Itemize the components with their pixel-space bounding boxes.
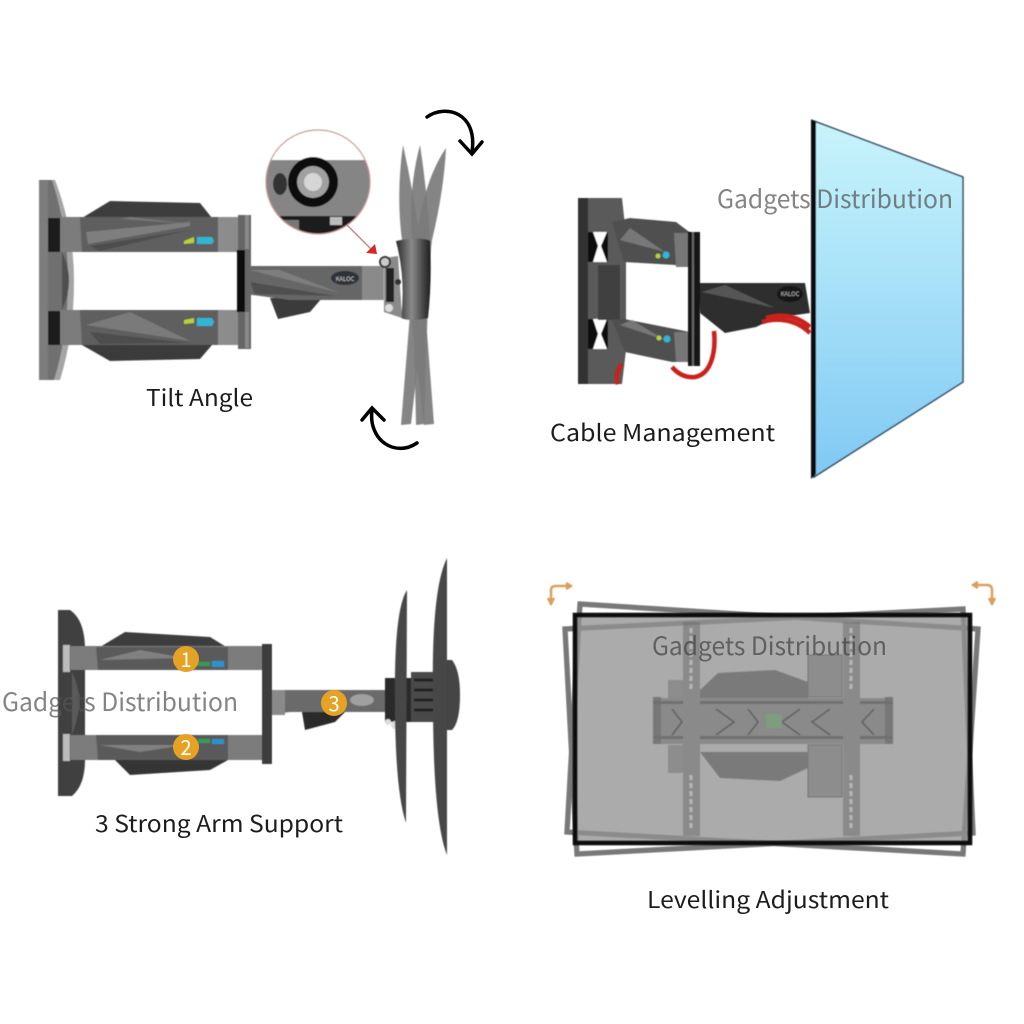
- icon: red cable: [617, 316, 810, 384]
- arrow: left rotation: [548, 583, 571, 604]
- icon: lower arm: [60, 310, 240, 361]
- icon: forearm: KALOC: [781, 289, 800, 298]
- panel: arm support: [2, 558, 460, 855]
- icon: wall plate: [39, 180, 74, 380]
- panel: cable management: [550, 119, 963, 479]
- icon: upper arm: [612, 218, 692, 267]
- watermark: Gadgets Distribution: [717, 180, 953, 216]
- icon: wall plate: [578, 198, 626, 384]
- icon: column: [237, 215, 251, 349]
- icon: tilted tv frames: [565, 604, 978, 854]
- icon: forearm: [245, 266, 384, 319]
- callout: badge 2: [173, 732, 199, 761]
- icon: forearm: [697, 283, 810, 333]
- icon: tilted frames over screen: [565, 604, 978, 854]
- icon: tilt head: [380, 238, 431, 320]
- watermark: Gadgets Distribution: [2, 683, 238, 719]
- callout: badge 2: 2: [180, 732, 192, 761]
- arrow: inset pointer: [347, 225, 377, 254]
- icon: inset hinge detail: [264, 128, 372, 236]
- arrow: right rotation: [973, 582, 995, 604]
- arrow: tilt down: [362, 408, 417, 448]
- panel: tilt angle: [39, 111, 482, 448]
- icon: forearm: KALOC: [336, 274, 355, 283]
- panel: levelling adjustment: [548, 582, 995, 915]
- callout: badge 1: [173, 644, 199, 673]
- icon: swivel head: [385, 660, 460, 730]
- caption: Tilt Angle: [146, 379, 253, 413]
- icon: mount behind screen: [653, 622, 893, 836]
- icon: column: [262, 644, 272, 764]
- icon: upper arm: [60, 201, 240, 252]
- icon: tv plates: [395, 558, 447, 855]
- icon: level tv frame: [575, 615, 970, 843]
- watermark: Gadgets Distribution: [652, 627, 887, 663]
- caption: 3 Strong Arm Support: [95, 805, 343, 839]
- callout: badge 3: 3: [328, 688, 340, 717]
- icon: tilting plates: [399, 145, 446, 425]
- icon: oval logo: [350, 694, 374, 706]
- callout: badge 1: 1: [180, 644, 192, 673]
- arrow: tilt up: [427, 111, 482, 154]
- icon: tv screen: [811, 119, 963, 479]
- icon: upper arm: [70, 632, 265, 670]
- caption: Levelling Adjustment: [647, 881, 889, 915]
- icon: level tv screen: [575, 615, 970, 843]
- icon: lower arm: [70, 735, 265, 775]
- icon: column: [688, 232, 700, 366]
- caption: Cable Management: [550, 414, 775, 448]
- icon: forearm: [265, 690, 390, 730]
- icon: wall plate: [58, 610, 85, 796]
- callout: badge 3: [321, 688, 347, 717]
- icon: lower arm: [612, 319, 692, 362]
